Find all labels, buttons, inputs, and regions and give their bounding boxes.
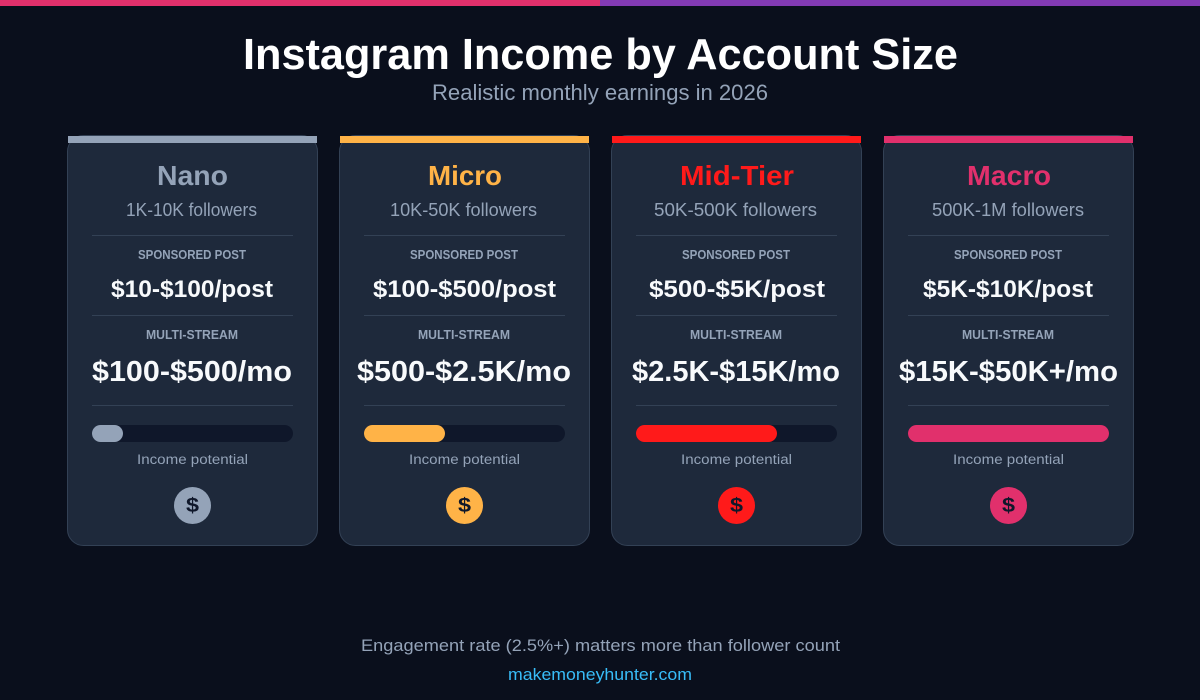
Macro income caption: Income potential xyxy=(953,452,1064,467)
Nano income bar xyxy=(92,425,293,442)
panel: Mid-Tier xyxy=(612,136,862,546)
Nano multi-stream label: MULTI-STREAM xyxy=(146,328,238,342)
icon: Mid-Tier dollar xyxy=(718,487,755,524)
title: Instagram Income by Account Size xyxy=(243,30,958,79)
panel: Nano xyxy=(68,136,318,546)
icon: Mid-Tier dollar: $ xyxy=(730,495,743,517)
icon: Micro dollar xyxy=(446,487,483,524)
Micro sponsored price: $100-$500/post xyxy=(373,276,556,303)
Nano sponsored price: $10-$100/post xyxy=(111,276,273,303)
Nano name: Nano xyxy=(157,160,228,191)
footer note: Engagement rate (2.5%+) matters more than follower count xyxy=(361,636,840,655)
Micro income bar xyxy=(364,425,565,442)
Mid-Tier sponsored label: SPONSORED POST xyxy=(682,248,790,262)
icon: Macro dollar xyxy=(990,487,1027,524)
Micro multi-stream label: MULTI-STREAM xyxy=(418,328,510,342)
Macro sponsored label: SPONSORED POST xyxy=(954,248,1062,262)
icon: Nano dollar: $ xyxy=(186,495,199,517)
footer link: makemoneyhunter.com xyxy=(508,665,692,684)
Mid-Tier multi-stream income: $2.5K-$15K/mo xyxy=(632,356,840,388)
Micro sponsored label: SPONSORED POST xyxy=(410,248,518,262)
Mid-Tier sponsored price: $500-$5K/post xyxy=(649,276,825,303)
Macro sponsored price: $5K-$10K/post xyxy=(923,276,1093,303)
icon: Macro dollar: $ xyxy=(1002,495,1015,517)
Macro followers: 500K-1M followers xyxy=(932,200,1084,220)
subtitle: Realistic monthly earnings in 2026 xyxy=(432,80,768,105)
Micro name: Micro xyxy=(428,160,502,191)
Micro income caption: Income potential xyxy=(409,452,520,467)
Macro multi-stream income: $15K-$50K+/mo xyxy=(899,356,1118,388)
top gradient bar xyxy=(0,0,1200,6)
panel: Macro xyxy=(884,136,1134,546)
Micro followers: 10K-50K followers xyxy=(390,200,537,220)
Nano multi-stream income: $100-$500/mo xyxy=(92,356,292,388)
icon: Micro dollar: $ xyxy=(458,495,471,517)
Micro multi-stream income: $500-$2.5K/mo xyxy=(357,356,571,388)
Mid-Tier multi-stream label: MULTI-STREAM xyxy=(690,328,782,342)
Mid-Tier income caption: Income potential xyxy=(681,452,792,467)
Macro multi-stream label: MULTI-STREAM xyxy=(962,328,1054,342)
Mid-Tier followers: 50K-500K followers xyxy=(654,200,817,220)
Nano income caption: Income potential xyxy=(137,452,248,467)
Nano followers: 1K-10K followers xyxy=(126,200,257,220)
Mid-Tier income bar xyxy=(636,425,837,442)
Nano sponsored label: SPONSORED POST xyxy=(138,248,246,262)
panel: Micro xyxy=(340,136,590,546)
Macro income bar xyxy=(908,425,1109,442)
Macro name: Macro xyxy=(967,160,1051,191)
Mid-Tier name: Mid-Tier xyxy=(680,160,794,191)
icon: Nano dollar xyxy=(174,487,211,524)
